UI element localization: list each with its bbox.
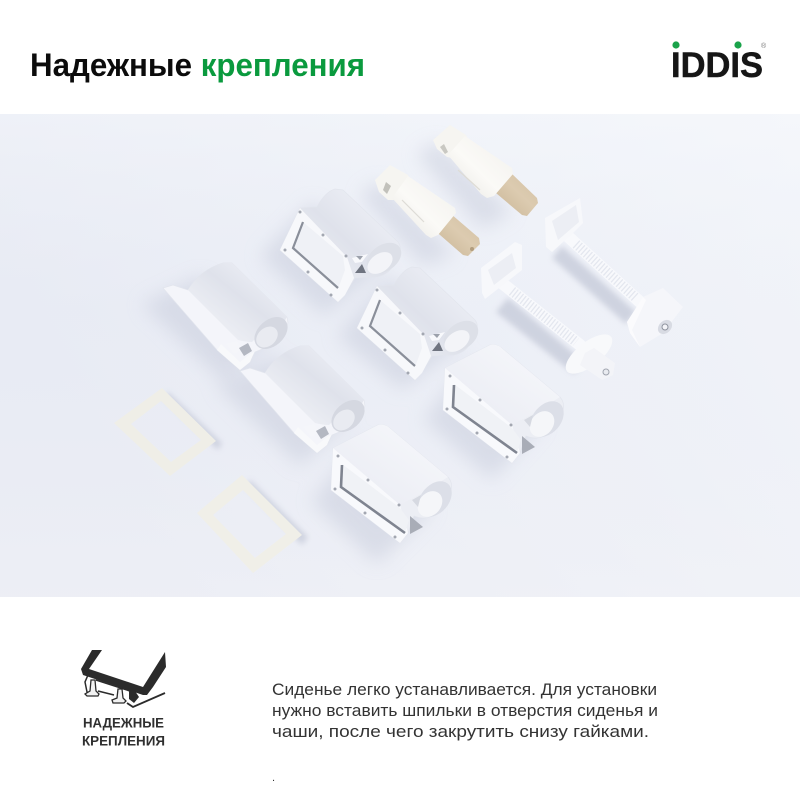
seat outline (81, 650, 166, 695)
icon: seat hinge (81, 650, 166, 707)
screw left (481, 242, 618, 381)
logo: iDDiS: ® (761, 42, 767, 50)
trailing dot: . (272, 772, 275, 784)
product photo panel (0, 114, 800, 597)
hinge pins (85, 680, 126, 703)
description text (272, 680, 658, 741)
bracket A (280, 189, 407, 302)
icon label: КРЕПЛЕНИЯ (82, 734, 165, 748)
description text: нужно вставить шпильки в отверстия сиденья и (272, 701, 658, 720)
bracket D (331, 425, 459, 543)
soft shadows (142, 142, 542, 564)
gasket 1 (114, 388, 216, 476)
icon label (82, 716, 165, 748)
pin upper left (375, 165, 480, 256)
pin upper right (433, 125, 538, 216)
icon label: НАДЕЖНЫЕ (83, 716, 164, 730)
gasket 2 (197, 475, 302, 573)
description text: чаши, после чего закрутить снизу гайками. (272, 722, 649, 741)
seat base line (127, 693, 165, 707)
hinge cylinder (85, 675, 130, 695)
screw right (546, 225, 672, 346)
logo: iDDiS: IDDIS (671, 46, 763, 85)
gaskets (114, 388, 302, 573)
bracket B (357, 267, 484, 380)
bracket F (240, 346, 371, 453)
bracket E (163, 263, 294, 370)
bracket C (443, 351, 564, 463)
description text: Сиденье легко устанавливается. Для установки (272, 680, 657, 699)
title: Надежные крепления (30, 47, 365, 83)
